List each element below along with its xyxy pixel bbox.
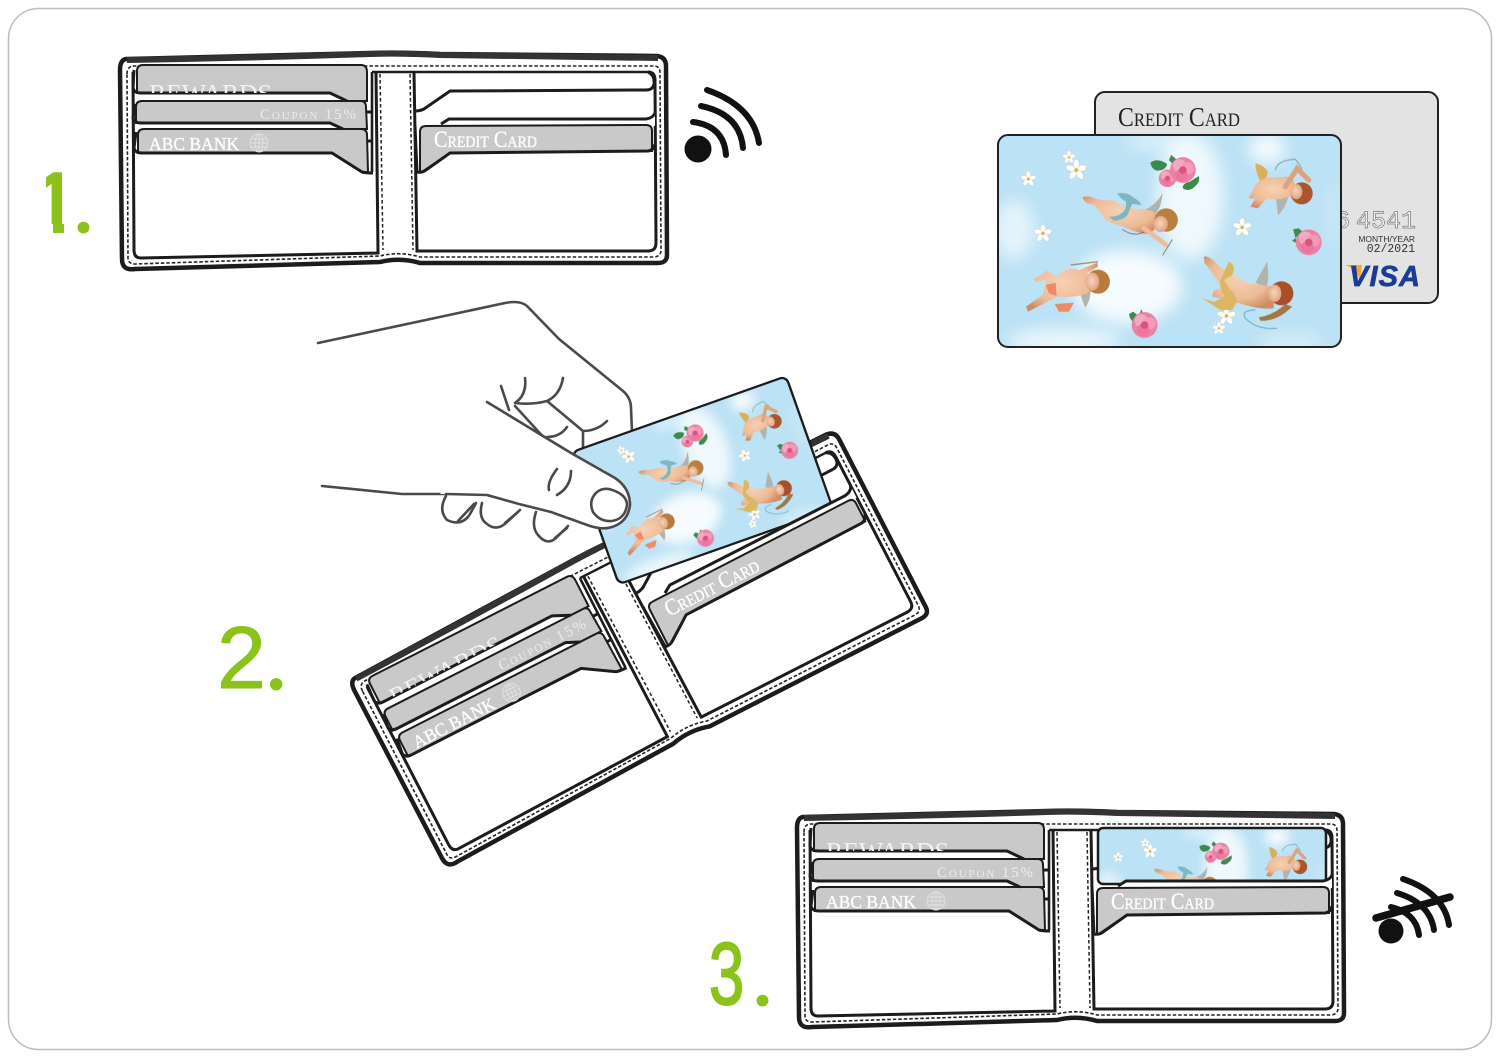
- back credit card: VISA: [1349, 261, 1420, 293]
- wallet 1: open wallet without blocking card: [120, 53, 667, 269]
- step number 1: 1: [32, 156, 79, 250]
- wallet 2: tilted wallet base: REWARDS: [384, 630, 508, 712]
- wallet 2: tilted wallet base: ABC BANK: [409, 694, 499, 752]
- blocking card inside wallet 3 pocket: [1096, 826, 1328, 886]
- wallet 3: wallet with blocking card inserted: Coupon 15%: [937, 865, 1033, 881]
- wallet 2: tilted wallet base: [347, 427, 932, 868]
- hand: thumb holding the card: [440, 402, 630, 528]
- step number 2: .: [263, 595, 289, 712]
- wallet 3: wallet with blocking card inserted: [797, 811, 1344, 1027]
- back credit card: 6 4541: [1335, 207, 1416, 236]
- wallet 2: front pockets over the card: [636, 485, 878, 648]
- back credit card: 02/2021: [1367, 243, 1415, 256]
- icon: wireless signal active: [684, 90, 759, 162]
- step number 1: .: [71, 143, 96, 254]
- step number 1: [46, 172, 90, 234]
- step number 3: 3: [709, 926, 744, 1024]
- wallet 3: wallet with blocking card inserted: REWARDS: [826, 837, 949, 867]
- back credit card: Credit Card: [1118, 102, 1240, 132]
- wallet 3: credit card pocket: [1092, 874, 1332, 934]
- wallet 2: front pockets over the card: Credit Card: [660, 552, 763, 621]
- step number 2: 2: [217, 608, 266, 707]
- hand: back of hand and fingers: [318, 302, 632, 541]
- step number 2: [217, 595, 289, 712]
- wallet 1: open wallet without blocking card: ABC BANK: [149, 134, 239, 154]
- step number 3: .: [750, 916, 775, 1027]
- front blocking card with cherub design: [994, 133, 1341, 355]
- wallet 3: wallet with blocking card inserted: ABC BANK: [826, 892, 916, 912]
- icon: wireless signal blocked: [1376, 879, 1450, 944]
- wallet 3: credit card pocket: Credit Card: [1111, 889, 1214, 914]
- wallet 1: open wallet without blocking card: Credit Card: [434, 127, 537, 152]
- back credit card: [1095, 92, 1438, 303]
- step number 3: [709, 916, 775, 1027]
- wallet 2: tilted wallet base: Coupon 15%: [496, 617, 589, 674]
- blocking card being inserted: [569, 375, 835, 590]
- back credit card: MONTH/YEAR: [1358, 234, 1415, 244]
- wallet 1: open wallet without blocking card: Coupon 15%: [260, 107, 356, 123]
- wallet 1: open wallet without blocking card: REWARDS: [149, 79, 272, 109]
